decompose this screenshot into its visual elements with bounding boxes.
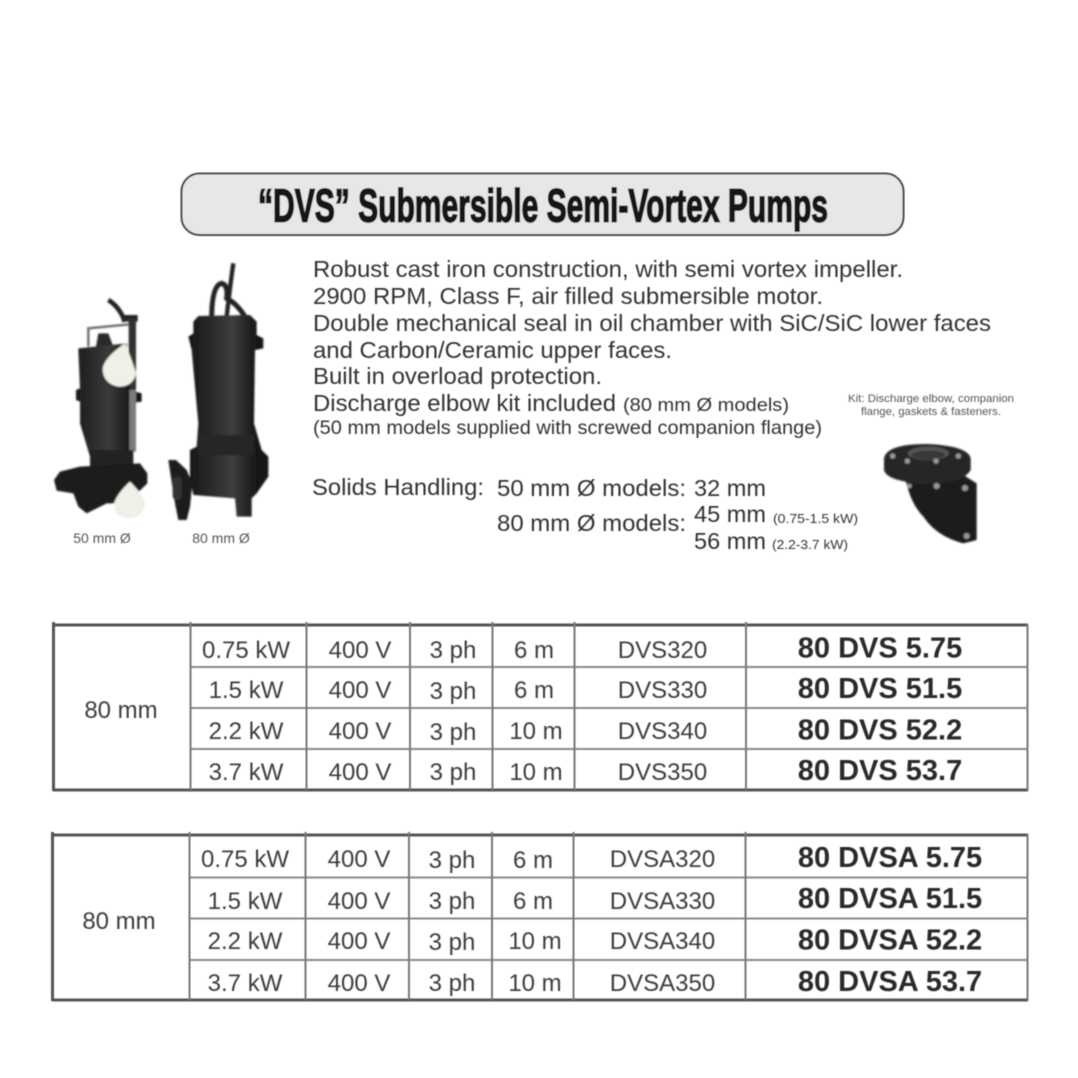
text block: features: Discharge elbow kit included: [313, 390, 616, 416]
row: 1.5 kW: [208, 883, 982, 915]
row: 2.2 kW: [208, 924, 982, 956]
row: 1.5 kW: 400 V: [329, 677, 391, 704]
caption: kit description: flange, gaskets & fasteners.: [861, 406, 1001, 418]
caption: 80 mm: 80 mm Ø: [192, 530, 250, 546]
text block: features: Built in overload protection.: [313, 363, 602, 389]
row: 2.2 kW: 400 V: [329, 718, 391, 745]
text block: solids handling: 45 mm: [694, 501, 766, 527]
row: 2.2 kW: 80 DVSA 52.2: [798, 924, 982, 956]
caption: kit description: Kit: Discharge elbow, companion: [848, 393, 1014, 405]
text block: features: Robust cast iron construction, with semi vortex impeller.: [313, 256, 903, 282]
row: 3.7 kW: [208, 966, 982, 998]
row: 2.2 kW: 10 m: [508, 928, 562, 955]
row label: 80 mm: 80 mm: [84, 697, 158, 724]
row: 2.2 kW: DVS340: [618, 718, 707, 745]
row: 3.7 kW: 3.7 kW: [209, 759, 284, 786]
title banner: [182, 174, 904, 235]
text block: features: (50 mm models supplied with screwed companion flange): [313, 417, 822, 439]
row: 1.5 kW: 400 V: [328, 888, 390, 915]
text block: features: (80 mm Ø models): [623, 394, 789, 415]
row: 0.75 kW: DVSA320: [610, 846, 715, 873]
row: 1.5 kW: 3 ph: [429, 888, 475, 915]
row: 0.75 kW: DVS320: [618, 637, 707, 664]
text block: solids handling: (0.75-1.5 kW): [773, 511, 858, 526]
row: 1.5 kW: 1.5 kW: [208, 888, 283, 915]
row: 3.7 kW: 80 DVS 53.7: [798, 755, 962, 787]
text block: features: 2900 RPM, Class F, air filled submersible motor.: [313, 283, 823, 309]
row: 3.7 kW: 10 m: [509, 759, 563, 786]
row: 2.2 kW: 80 DVS 52.2: [798, 714, 962, 746]
text block: solids handling: 50 mm Ø models:: [497, 475, 686, 501]
row: 1.5 kW: 80 DVS 51.5: [798, 673, 962, 705]
caption: kit description: [848, 393, 1014, 418]
row: 0.75 kW: 6 m: [514, 637, 554, 664]
text block: solids handling: Solids Handling:: [312, 474, 484, 500]
text block: solids handling: 80 mm Ø models:: [497, 510, 686, 536]
row: 3.7 kW: DVS350: [618, 759, 707, 786]
row: 2.2 kW: 3 ph: [430, 719, 476, 746]
icon: 50 mm pump photo: [54, 300, 147, 518]
text block: solids handling: 56 mm: [694, 528, 766, 554]
row: 3.7 kW: 3.7 kW: [208, 970, 283, 997]
row: 1.5 kW: 3 ph: [430, 678, 476, 705]
row: 0.75 kW: 80 DVS 5.75: [798, 632, 962, 664]
row: 2.2 kW: 10 m: [509, 718, 563, 745]
row: 3.7 kW: 400 V: [328, 970, 390, 997]
row: 0.75 kW: 400 V: [329, 637, 391, 664]
row: 2.2 kW: 2.2 kW: [209, 718, 284, 745]
row: 1.5 kW: [209, 673, 962, 705]
row: 3.7 kW: 3 ph: [430, 759, 476, 786]
row: 2.2 kW: [209, 714, 962, 746]
row: 0.75 kW: [201, 842, 982, 874]
row: 0.75 kW: 3 ph: [429, 847, 475, 874]
row: 2.2 kW: DVSA340: [610, 928, 715, 955]
row: 2.2 kW: 3 ph: [429, 929, 475, 956]
text block: solids handling: [312, 474, 858, 554]
row: 0.75 kW: 0.75 kW: [202, 637, 290, 664]
row: 1.5 kW: 80 DVSA 51.5: [798, 883, 982, 915]
icon: 80 mm pump photo: [168, 263, 268, 520]
row: 3.7 kW: 400 V: [329, 759, 391, 786]
row: 3.7 kW: 3 ph: [429, 970, 475, 997]
row: 1.5 kW: DVS330: [618, 677, 707, 704]
row label: 80 mm: 80 mm: [82, 908, 156, 935]
row: 0.75 kW: 3 ph: [430, 637, 476, 664]
text block: features: [313, 256, 991, 439]
caption: 50 mm: 50 mm Ø: [73, 530, 131, 546]
row: 0.75 kW: 80 DVSA 5.75: [798, 842, 982, 874]
text block: solids handling: 32 mm: [694, 475, 766, 501]
row: 0.75 kW: 400 V: [328, 846, 390, 873]
row: 2.2 kW: 400 V: [328, 928, 390, 955]
row: 2.2 kW: 2.2 kW: [208, 928, 283, 955]
row: 0.75 kW: [202, 632, 962, 664]
text block: solids handling: (2.2-3.7 kW): [772, 537, 848, 552]
row: 3.7 kW: DVSA350: [610, 970, 715, 997]
row: 1.5 kW: DVSA330: [610, 888, 715, 915]
row: 1.5 kW: 6 m: [513, 888, 553, 915]
text block: features: Double mechanical seal in oil chamber with SiC/SiC lower faces: [313, 310, 991, 336]
row: 3.7 kW: 80 DVSA 53.7: [798, 966, 982, 998]
table: DVS models: [53, 622, 1028, 791]
row: 0.75 kW: 0.75 kW: [201, 846, 289, 873]
icon: discharge elbow kit: [884, 444, 977, 543]
text block: features: and Carbon/Ceramic upper faces.: [313, 337, 672, 363]
row: 3.7 kW: [209, 755, 962, 787]
row: 3.7 kW: 10 m: [508, 970, 562, 997]
table: DVSA models: [52, 832, 1028, 1001]
row: 1.5 kW: 6 m: [514, 677, 554, 704]
row: 1.5 kW: 1.5 kW: [209, 677, 284, 704]
row: 0.75 kW: 6 m: [513, 847, 553, 874]
